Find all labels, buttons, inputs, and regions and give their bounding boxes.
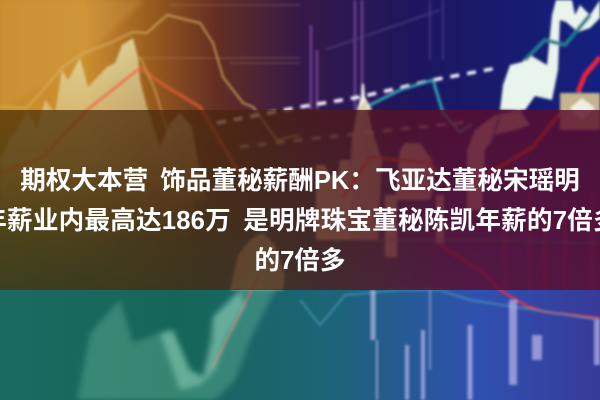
- bright red line top right: [578, 57, 600, 92]
- second tan line: [140, 57, 170, 140]
- second dashed line: [240, 122, 467, 147]
- white candle cluster top right: [500, 0, 600, 110]
- teal curve: [370, 80, 472, 132]
- white center peak: [357, 84, 372, 110]
- grid lines: [140, 5, 300, 63]
- cream block right: [560, 93, 600, 130]
- dark translucent title band: [0, 110, 600, 290]
- title line 1: 期权大本营 饰品董秘薪酬PK：飞亚达董秘宋瑶明: [20, 167, 580, 195]
- dashed white line: [217, 68, 497, 123]
- light diagonal wedge top left: [0, 0, 145, 110]
- red low line: [343, 157, 450, 197]
- red curve in band: [478, 113, 560, 178]
- red-pink descending line: [440, 245, 600, 318]
- tan candle blocks: [316, 110, 530, 257]
- title line 3: 的7倍多: [254, 247, 346, 275]
- pink/maroon stripes right: [505, 190, 592, 290]
- tan trend line: [0, 15, 300, 140]
- lilac spikes: [373, 290, 597, 400]
- teal line mid: [300, 240, 600, 270]
- red bottom-left line: [213, 273, 260, 367]
- teal right curve: [525, 15, 590, 60]
- center bottom candles: [230, 233, 285, 290]
- orange-red line: [0, 68, 250, 190]
- purple spikes: [311, 0, 443, 110]
- tan center peak: [345, 100, 382, 240]
- left mountain area: [0, 38, 207, 240]
- bottom left teal mountain: [77, 233, 283, 400]
